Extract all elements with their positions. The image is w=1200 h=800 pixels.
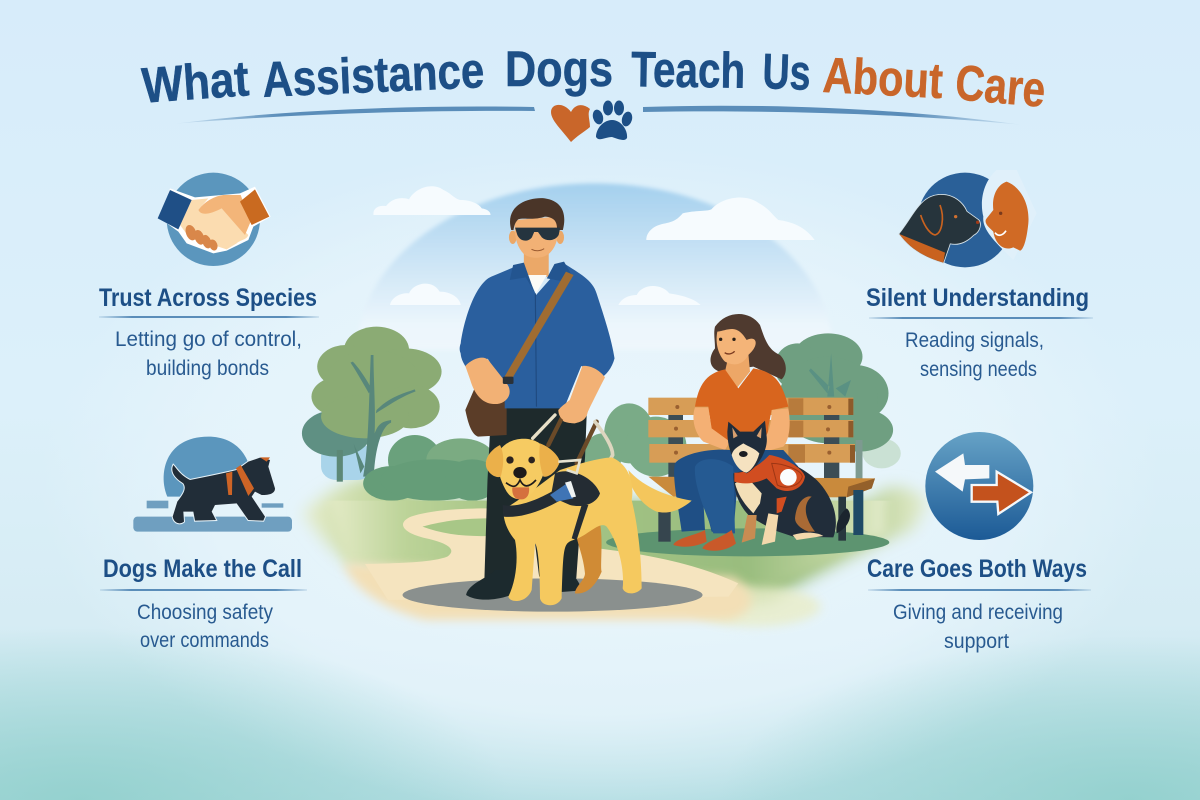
- title underline right: [643, 106, 1023, 125]
- man's hand on handle: [558, 398, 592, 423]
- text: dogs description: [137, 601, 273, 652]
- small service dog: [727, 421, 850, 545]
- title: Teach: [631, 41, 746, 99]
- heading: trust across species: Trust Across Species: [99, 284, 317, 312]
- rule: [869, 317, 1093, 319]
- man with sunglasses: [460, 198, 615, 600]
- title: Care: [953, 54, 1048, 118]
- rule: [100, 589, 307, 591]
- tree right: [774, 333, 901, 480]
- outer lawn fading into the page: [304, 477, 928, 603]
- woman on bench with service dog: [648, 314, 875, 551]
- body and legs: [503, 457, 642, 605]
- text: care description: Giving and receiving: [893, 601, 1063, 624]
- guide dog with harness: [486, 398, 692, 605]
- far rear leg: [575, 523, 602, 593]
- text: care description: [893, 601, 1063, 653]
- title underline left: [172, 107, 535, 124]
- heading: care goes both ways: Care Goes Both Ways: [867, 555, 1087, 583]
- woman: [673, 314, 798, 551]
- text: silent description: Reading signals,: [905, 329, 1044, 352]
- bag: [465, 385, 507, 437]
- shirt: [460, 263, 615, 408]
- title: Dogs: [505, 41, 613, 97]
- footpath lower sand fade: [344, 563, 751, 620]
- harness handle: [533, 415, 613, 478]
- lawn: [336, 500, 888, 581]
- title: [140, 41, 1048, 118]
- rule: [868, 589, 1091, 591]
- sky dome: [357, 183, 833, 350]
- bush behind bench: [583, 403, 686, 480]
- title: About: [822, 47, 945, 109]
- trees left: [302, 327, 442, 482]
- shoes: [466, 570, 519, 600]
- heading: silent understanding: Silent Understanding: [866, 284, 1089, 312]
- title: What: [140, 50, 251, 114]
- icon: two-way arrows: [925, 432, 1033, 540]
- icon: dog walking: [133, 437, 292, 532]
- text: trust description: Letting go of control,: [115, 328, 302, 351]
- text: dogs description: Choosing safety: [137, 601, 273, 624]
- text: trust description: building bonds: [146, 357, 269, 380]
- text: dogs description: over commands: [140, 629, 269, 652]
- head: [498, 439, 546, 499]
- legs: [484, 407, 587, 578]
- lawn fading lower right: [690, 587, 820, 627]
- tail: [628, 470, 692, 513]
- strap: [504, 272, 574, 380]
- text: silent description: [905, 329, 1044, 381]
- inner lawn patch: [422, 518, 487, 536]
- panel: central park scene: [302, 183, 928, 627]
- head: [509, 231, 517, 244]
- harness: [503, 471, 600, 517]
- arms: [465, 358, 510, 404]
- neck: [524, 247, 549, 277]
- heading: dogs make the call: Dogs Make the Call: [103, 555, 302, 583]
- icon: handshake: [158, 173, 271, 266]
- text: trust description: [115, 328, 302, 380]
- text: care description: support: [944, 630, 1009, 653]
- title: Assistance: [261, 42, 485, 108]
- title: Us: [762, 43, 812, 101]
- footpath: [365, 508, 738, 600]
- ground shadow under guide dog: [403, 578, 703, 612]
- rule: [99, 316, 319, 318]
- icon: dog and human faces: [899, 170, 1037, 267]
- bench: [648, 398, 875, 542]
- clouds: [373, 186, 815, 305]
- park backdrop: [302, 183, 928, 627]
- bench ground shadow: [606, 528, 889, 556]
- bush left: [363, 435, 499, 501]
- text: silent description: sensing needs: [920, 358, 1037, 381]
- icon: heart and paw: [551, 100, 634, 142]
